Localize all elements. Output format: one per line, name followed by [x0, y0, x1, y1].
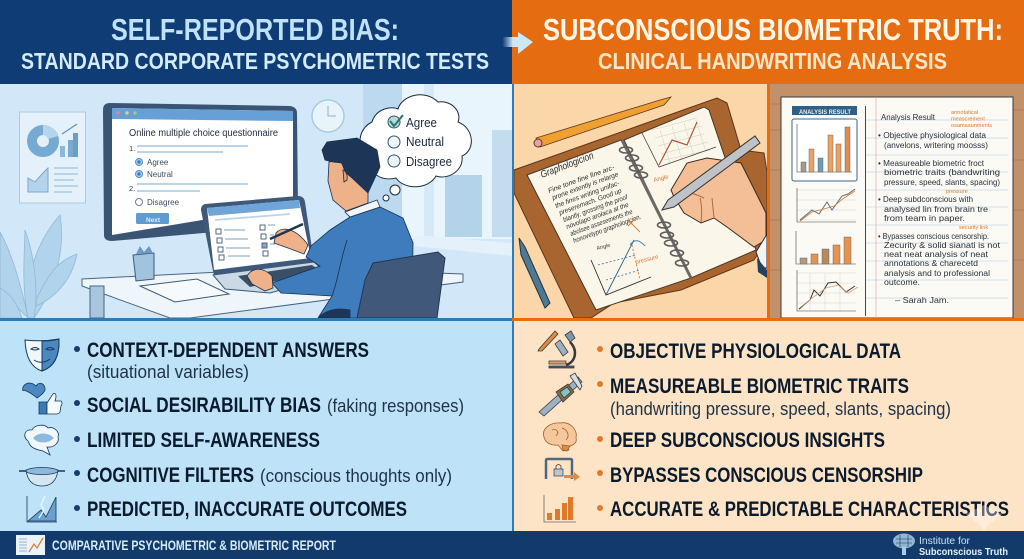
- report notes: pressure: [946, 189, 968, 195]
- heading: self-reported bias: SELF-REPORTED BIAS:: [111, 12, 399, 47]
- report notes: analysis and to professional: [884, 268, 990, 278]
- monitor: Disagree: [147, 198, 180, 207]
- laptop: [201, 196, 330, 293]
- icon: brain cloud: [25, 425, 58, 455]
- list item: limited self-awareness: LIMITED SELF-AWARENESS: [87, 429, 320, 452]
- subheading: clinical handwriting analysis: CLINICAL HANDWRITING ANALYSIS: [598, 48, 947, 74]
- monitor: [103, 103, 298, 241]
- institute name: Subconscious Truth: [919, 546, 1008, 558]
- report notes: pressure, speed, slants, spacing): [884, 177, 1000, 187]
- institute name: Institute for: [919, 535, 970, 547]
- icon: institute brain: [893, 534, 915, 555]
- icon: theatre mask: [25, 339, 59, 371]
- icon: pencil and microscope: [538, 331, 575, 368]
- handwritten note: [539, 150, 642, 245]
- list item: context-dependent answers: (situational variables): [87, 361, 249, 382]
- report notes: • Objective physiological data: [878, 130, 986, 140]
- chart: line graph: [642, 118, 716, 167]
- illustration: person taking online questionnaire: [0, 84, 512, 318]
- list item: cognitive filters: [74, 464, 452, 487]
- icon: heart and thumbs up: [23, 383, 62, 414]
- report notes: osamasunments: [951, 123, 992, 129]
- report notes: [878, 110, 1001, 305]
- notebook: pressure: [635, 254, 660, 266]
- list item: context-dependent answers: [74, 339, 369, 382]
- report notes: outcome.: [884, 277, 920, 287]
- illustration: handwriting notebook: [514, 84, 770, 318]
- illustration: analysis result report: [770, 84, 1024, 318]
- pencil: [534, 97, 671, 147]
- pencil lower: [519, 238, 550, 308]
- chart: angle diagram: [591, 218, 651, 295]
- list item: bypasses conscious censorship: BYPASSES CONSCIOUS CENSORSHIP: [610, 464, 923, 487]
- handwritten note: abolsee assesements the: [569, 209, 634, 238]
- chart: bars 1: [792, 119, 857, 181]
- handwritten note: Graphologicion: [539, 150, 596, 181]
- monitor text: questionnaire title: Online multiple choice questionnaire: [129, 128, 278, 139]
- report notes: • Deep subdconscious with: [878, 194, 973, 204]
- thought bubble: Neutral: [406, 135, 444, 149]
- list item: deep subconscious insights: DEEP SUBCONSCIOUS INSIGHTS: [610, 429, 885, 452]
- list item: measureable biometric traits: (handwriting pressure, speed, slants, spacing): [610, 398, 951, 419]
- list item: predicted outcomes: PREDICTED, INACCURATE OUTCOMES: [87, 498, 407, 521]
- report notes: from team in paper.: [884, 213, 965, 223]
- panel: right header: [512, 0, 1024, 84]
- desk: [82, 268, 463, 318]
- icon: strainer: [19, 468, 65, 486]
- icon: rising bars: [544, 495, 576, 522]
- report notes: security link: [959, 225, 988, 231]
- report notes: • Measureable biometric froct: [878, 158, 985, 168]
- chart: line 2: [797, 270, 858, 311]
- label: analysis result: ANALYSIS RESULT: [799, 109, 851, 116]
- institute name: [919, 535, 1008, 558]
- icon: broken chart: [27, 496, 57, 522]
- list item: cognitive filters: COGNITIVE FILTERS: [87, 464, 254, 487]
- notebook: [514, 98, 767, 318]
- chart: bars 2: [796, 231, 856, 264]
- monitor: 2.: [129, 184, 135, 193]
- subheading: standard tests: STANDARD CORPORATE PSYCHOMETRIC TESTS: [21, 48, 489, 74]
- panel: left header: [0, 0, 512, 84]
- handwritten note: blantly, grossing the proof: [562, 194, 630, 224]
- list item: context-dependent answers: CONTEXT-DEPENDENT ANSWERS: [87, 339, 369, 362]
- monitor: Next: [146, 217, 161, 224]
- clock: [312, 100, 344, 132]
- icon: report: [16, 535, 45, 555]
- thought bubble: Disagree: [406, 155, 452, 169]
- arrow: header transition: [497, 32, 533, 54]
- handwritten note: the fines writing unifac-: [554, 180, 621, 210]
- list item: social desirability bias: SOCIAL DESIRABILITY BIAS: [87, 394, 321, 417]
- writing hand and pen: [662, 136, 767, 278]
- monitor: 1.: [129, 144, 135, 153]
- handwritten note: honovetypo graphologicion.: [572, 214, 642, 245]
- icon: brain: [543, 423, 576, 451]
- handwritten note: preseremach. Good up: [557, 188, 623, 217]
- footer title: COMPARATIVE PSYCHOMETRIC & BIOMETRIC REPORT: [52, 537, 336, 553]
- report notes: biometric traits (bandwriting: [884, 167, 1000, 177]
- list item: measureable biometric traits: [597, 375, 951, 419]
- monitor: Neutral: [147, 170, 173, 179]
- handwritten note: novolapo arolaca at the: [565, 202, 630, 231]
- thought bubble: [360, 95, 471, 201]
- report notes: (anvelons, writering moosss): [884, 140, 988, 150]
- plant: [0, 215, 77, 318]
- panel: left bias list: [0, 321, 512, 531]
- pen cup: [133, 246, 154, 281]
- report notes: Zecurity & solid sianati is not: [884, 240, 1001, 250]
- handwritten note: prone extently is relarge: [550, 171, 620, 202]
- icon: security gate: [546, 459, 580, 481]
- person: [247, 138, 413, 318]
- notebook: Angle: [596, 243, 611, 252]
- list item: measureable biometric traits: MEASUREABLE BIOMETRIC TRAITS: [610, 375, 909, 398]
- poster: charts: [20, 112, 86, 203]
- notebook: Angle: [653, 174, 670, 184]
- thought bubble: Agree: [406, 116, 437, 130]
- report notes: annotatical: [951, 110, 978, 116]
- label: analysis result: [792, 106, 857, 116]
- report notes: – Sarah Jam.: [895, 295, 949, 305]
- chart: line 1: [797, 188, 856, 222]
- list item: objective physiological data: OBJECTIVE PHYSIOLOGICAL DATA: [610, 340, 901, 363]
- monitor: Agree: [147, 158, 169, 167]
- list item: cognitive filters: (conscious thoughts only): [260, 465, 452, 486]
- report notes: Analysis Result: [881, 112, 936, 122]
- report notes: analysed lin from brain tre: [884, 204, 988, 214]
- footer bar: [0, 531, 1024, 559]
- report notes: annotations & charecetd: [884, 258, 978, 268]
- chair: [357, 252, 445, 318]
- report notes: meascrement: [951, 116, 985, 122]
- icon: caliper: [539, 373, 582, 416]
- panel: right truth list: [512, 321, 1024, 536]
- list item: social desirability bias: (faking responses): [327, 395, 464, 416]
- handwritten note: Fine tone fine fine arc-: [547, 164, 616, 195]
- report notes: • Bypasses conscious censorship.: [878, 231, 989, 241]
- report notes: neat neat analysis of neat: [884, 249, 989, 259]
